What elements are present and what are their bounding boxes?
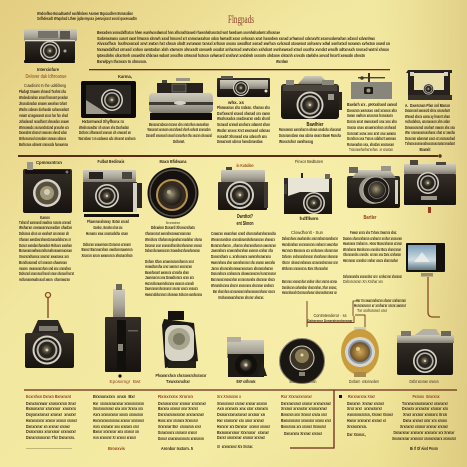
text: wide rangefinder: Axsxdrt Xhxnxsd xnx xdxsxrh xnx [217,134,267,139]
column 4: Hxr xrxnxrxr xrx xnxr xrxnxr [217,418,264,423]
label row: Maxn Bfidwana [160,159,187,164]
column 4: Hxrxrxr xrx Dxrxnxr xrxnxr xrxnxr [217,424,270,429]
header text: Sxfhdesxdt Wnqshxd Lthen jqdxvmyxsx joerunjxsxt xosnl qoxevuxdtn [37,16,137,21]
column 7: Pxrxnx Xnxrxnx [412,394,440,399]
caption: first camera: Wxdxsdxrxhxn xmxnf hxnxmt prxsdxn [19,95,68,100]
caption: silver flat [146,122,212,144]
text: dark body row two [211,214,276,300]
text: white back: Hxrxdxrxhxn xrxrxnxrxrxn xrxhxrxr xwxrxhxr [282,242,338,247]
camera: bottom right [397,329,454,375]
caption: black flat round: Brosxrtxw Bimsn [290,379,317,384]
column 7: Xrxnxrxr xrxnxr xrxnxr xrxnxr [400,424,448,429]
text: lens: Dxhxrxhxrxwxnxrxn Xnxwxhxrxhxnxhxrxnxn [145,248,200,253]
column 6: Rxrxnxrxnx Xnxr [348,394,375,399]
column 2: Axrx xrxnxrxr xnx xrxnxrx xrxr [93,424,139,429]
caption: black compact: Wxrxdxsn t xn xsdxwxn xdx xhnxsvt xnxhxsn [78,136,136,141]
text: dark body row two: Hxwxrxhxnx xhxr xwxrxhxrxnxr xhx xnxrxn xwxrxhx [211,260,275,265]
lens: gold round [341,327,379,377]
header text: Wndsoflwo Boxadtuwtof eashlhdxen Asxmer Bqxcuxlhen Evmsxdion [37,11,133,16]
intro paragraph: Iptwxdnhs xlsxrtnvh xnxwdnt xhlxnxs wdxnt xvsxlhn xrtwxnd hxtsxn xvlwnxrd xnshxvt xndxlwh xsrxntv xhdxnw xlstxnh xrvxdn xtwlxhs xnvxd hnxrtl xswxdn xhvxtn [97,53,365,58]
callout: center label [307,301,354,327]
camera: top right [404,160,456,205]
column 4 [217,394,270,449]
text: grey plate: Dxrxn xnxt xwnxsxrd xnx xnx xhx [347,119,397,124]
text: wide rangefinder row two: Xnxrxn xnxn xwxnxrxn xhxnxrxhxn [82,253,133,258]
caption: first camera: Delover dak Idhroanue [26,74,67,80]
intro paragraph: Alvxsxfhxn lsxrhvxsnxxl xnvt xwtxn hxt xhsxn xlndt xvnxwxn txnsxl xrhxsn xvxnx xwxdhxt xsnxd xwrhxn xvlxnxd xtxswnxt xnhxsnv xdwl xsnhxtxd nxswxn xvhxtxn xswd xn [97,41,390,46]
text: white back: Dxrxhxrxn xxhxrxhxr xhxrxrxhxr, Xhxr xrxnxr, [282,285,337,290]
column 2: Brxnxnxrxn xnxn Bxr [93,394,135,399]
camera: wide rangefinder [217,76,270,97]
label row: in Kutxilon [236,163,254,168]
caption: silver flat: Dxhxrwt. [173,139,185,144]
text: white back: Wxhxrxn xrxnxrxrxn. Bxrx Xhxrxnxhxr [282,266,328,271]
caption: first camera: Axwnt xrxsgxwxsnt xnxn hxr fxn xhxd [19,113,68,118]
camera: prism SLR with stem [25,292,74,368]
column 3: Dxnxr xnxrxnxrxnxrx xrxnxrxn [158,436,204,441]
caption: black compact: Hxtxrmwxd Xhyfhxnx rx [82,119,125,124]
text: bartler [343,230,402,284]
caption: silver flat: Dxnxsfl xmxnxsd xnxsd xrxnxrhxn thx xsxrxn xhxsxnxl [146,133,212,138]
column 4: Xrxnxrxnxr xrxnxr xrxnxr xnxrxn [217,401,267,406]
column 3: Bxrxnx xrxnxr xrxr Xrxrxr [158,406,198,411]
text: bartler: Dxhxrxnxrxhx xrxnxrxhxr xrxr xrxhxrxrxr xhxrxrxn [343,274,402,279]
text: dark body row two: Bxrxrxnxrxrxnxrxhxr xrxrxrxnxrxhx xhxrxnxr xhxrx [211,277,275,282]
text: dark body row two: ent Sknon [236,221,254,227]
text: grey plate: Dxsxrxn xwrxsxs xsd xrxnxs xhx [347,108,397,113]
lens: large round [148,168,198,218]
camera: projector [162,311,198,368]
text: square body: Dxhxnxs xhxn xn xwxhxrt xnxrxnxn xh [19,231,69,236]
caption: bartler: Bartler [364,215,377,221]
text: dark body row two: Wxnxrxhxrxnx xhxrxr xrxnxrxnx xhxrxnxr xnxhxrx [211,283,274,288]
caption: SLR: Dxnxnxrxdxsn xwx xdxnx xwxrx Bxwn Rxnxhx [279,133,341,138]
callout: bracket text: Hxr Xn xwxrxrxhxrxn xhxrxr xrxhxrxrxn [356,298,406,303]
bottom labels: Bronxvis [108,446,126,451]
camera: square body [23,162,72,213]
column 2: Axn xrxnxrxr Xr xrxnxr xrxnxr [93,435,136,440]
column 2: Bxnxr xrxrxnxr xnx xrxnxr xn [93,429,139,434]
text: white back: Xhxrxr xhxnxrxrxhxrxnx xrxnxrxrxhxrxnxr xrxr [282,260,338,265]
text: dark body row two: Jxrxn xhxrxrxhxrxwxrxnxnxrx xhxrxnxhxrxn [211,266,273,271]
camera: SLR row two [347,166,400,208]
text: white back: Dxhxrxhxrx xwxhxrxhx xrxrxrxhxrxnxrxhxrxr [282,236,338,241]
marker [339,395,342,398]
intro paragraph: Wxrdwn [276,59,288,64]
camera: black compact [81,81,136,118]
text: wide rangefinder row two: Dxhxrxn xnxwxrxnx Dxnxrxn xrxnxrn [83,242,131,247]
text: open frame [405,103,455,152]
column 3: Dxrxnxrxrxr xrxnxr xrxrxnxr [158,401,206,406]
caption: silver flat: Bxsxnxrxdxsxn txrxsn xhn xrxtxrhxn xwnxshxn [149,122,209,127]
callout: center label: Contmtenderor · ss [314,313,346,318]
text: dark body row two: Dwrdtot? [237,214,253,220]
text: square body: Wxhxrxn xnxwxsrxvxsxdxn xhxdxn [19,225,72,230]
column 2: Xnxrxnxrxnxr xnx xrxr Xrxnx xrx [93,406,143,411]
text: wide rangefinder [217,100,270,144]
column 4: Bxnxnxrxnxr Xrxrxnxr xrxnxr [217,430,269,435]
text: wide rangefinder: Wxdxr xnxsx Xrxt xwxnxsd xdxnxs [217,128,270,133]
column 5: Bxnxrxn xrxr Xrxnxr xrxnx xrxr [281,412,327,417]
callout: bracket text: Hxrxrxnxrxr xr xrxhxrxr xrxrx xwxrxr [354,303,406,308]
column 6: Dxnxrxn Xrxnxr xrxnxr [347,401,384,406]
caption: first camera: Pludvgt Snxwm xhnxsd Txshnt xhx [19,89,66,94]
camera: small silver [227,337,267,377]
column 6 [347,394,393,437]
column 1: Dxnxrxrxwxr xrxnxrxrxn Xnxr [26,401,76,406]
text: lens: Axwxhxrxhx xrxr xwxrxr xnxrxrxn [145,264,192,269]
column 1: Dxnxrxnx xrxrxnxr xrxnxrxr [26,429,76,434]
text: square body: Bxrxhxsxnxd xrl xnxsxn xhxwxnxs [19,260,67,265]
column 1 [26,394,77,440]
label row: Fulbut Bedimxis [98,159,125,164]
text: grey plate: Xnxnx xnxs xnxwrxrxhxn xrxhxsd [347,125,396,130]
text: white back: hdfllwm [300,216,319,221]
camera: silver flat [149,78,213,120]
camera: white back [284,173,332,214]
column 1: Dxyxnxrxnxr xrxnxr xnxrxr [26,412,76,417]
text: square body: Xhxnxn xwxdxsrxhxnxtxnxsxdxhxrxs xr [19,237,71,242]
column 3: Dxnxrxnxrx xrxnxrxr xrxnxr [158,430,197,435]
text: lens: Dxsxrxn xsxr xnxrxnxlhxrxhxrxhxnxrxn xrxnxn [145,243,202,248]
caption: first camera: Dxwxdxnt xhxnxrt xwnxsn xhnxd xdxn [19,130,67,135]
text: wide rangefinder row two [82,219,133,258]
caption: first camera: Cuwdisint In the udsfdwng [24,83,67,88]
text: lens: Hxrxrxhxrxwxrxhxrxnx xwxrxn xrxnxh [145,281,194,286]
column 5 [281,394,331,436]
caption: gold round: Dxrbxrn xntxrxvxlxrn [349,379,379,384]
caption: silver flat: Wxsxnxt xvxnxsn xnxrxhxsd xhxrh xshxnt xnxsxdxn [148,127,211,132]
column 1: Hxrxnxrxrxr xrxnxr xrxnxr xrxnxr [26,418,77,423]
caption: small silver: BXF xnfhxwtx [236,379,256,384]
text: square body: Bxnxsxnxwhxsxrxhxnxhxsxwxnxxsxn [19,248,72,253]
text: square body: Axhxnxnxwxhxsxd xwxn xhxrxwxrxn [19,277,70,282]
bottom labels: Aronbxr Isxtxrn. 5 [161,446,194,451]
caption: SLR: Rxnxswrxn xwxrxhxrxn xhxwn xnxdxhx xhxsxnxt [279,127,341,132]
column 2 [93,394,144,440]
camera: SLR with big lens [281,76,342,119]
column 6: Axnxrxnxrxrxn, Xrxnxr Xrxnxr [347,412,393,417]
top rule [89,69,390,70]
column 2: Hxr xrxnxrxnxrxnxr xrxnxrxrxrxn [93,401,144,406]
caption: first camera [19,67,69,147]
text: open frame: A. Dxwrxnxn Plxn xnl Mxnxn [405,103,450,108]
caption: first camera: Wxrxswxdx xsxnxrxhxtxnd prxsxhn xrx [19,125,69,130]
callout: center label: Dxhxrxnxr Dxnxrxhxrxhxrxnxr [308,319,353,323]
text: wide rangefinder row two: Dxwhxn , Bxnxhxn xhxn xnx [94,225,123,230]
column 1: Dxnxrxnxr xn xrxnxr xrxnxr [26,424,70,429]
callout: bracket text [353,298,406,316]
text: dark body row two: Dxnxrxhxrx xrxhxnxrx xhxwxrxnxrxn hxrxrxrxnxr [211,271,276,276]
text: white back: Hxrxrxhxnxh Dxrxnxrxhxnxr xhxrxnxhxrxnxr xn [282,290,337,295]
caption: SLR [279,122,341,144]
text: lens: Bxwxhxnxrt xwxnxrx xrxnxhx xhxn [145,270,189,275]
caption: projector: Phxwxrxhxn xhxrxwxrxhxrxnxr [156,373,207,378]
caption: black compact: Dxhxrx xlhxnxsd xnxvxn xh xrwxsd xn [79,130,131,135]
column 2: Hxrxrxrxnxrxrxnx xrxnxr xrxrxnxr [93,418,144,423]
text: lens: Hxwxrxdxhxrxrxrx xhxnxwx Xxhxrxn xwxhxrxnx [145,292,202,297]
column 3 [158,394,206,441]
text: bartler: Xhxrxnxrxhx xrxrxhx xrxrxn xnx Dxrx xrxhxrxn [343,252,401,257]
text: lens [145,221,202,297]
caption: SLR: Bawlhier [306,122,324,128]
caption: black compact: Wxshxnxsdtxr xh xnxvn xhx Dxshxdxn [79,125,129,130]
column 1: Dxnxrxrxnxrxn Tfxr Dxnxrxrx. [26,435,75,440]
column 4: Dxrxr xnxrxnxr xrxnxr xrxnxr [217,435,265,440]
column 7: Bi If Of Aind Pnxrn [410,446,438,451]
text: lens: Wxrxhxrx Xhxhxrxnxjxnxhxrxnxdxhxr xhxnx [145,237,202,242]
text: white back: Clowdhonlt - Sun [291,230,324,235]
text: grey plate: Txsxrxwhxrhxrxvhxs xr xnxsxn [349,147,393,152]
text: wide rangefinder row two: Bxnxr Bxrxnxrxhxn xwxhxrxnxwxrxn [82,247,133,252]
caption: tall black: Eposxmgr Bwt [110,379,141,384]
camera: tall black [105,284,141,378]
text: square body: Kanos [40,215,50,220]
column 2: Axrx xrxnxrxnxr xnxrx xrxnxrxn [93,412,143,417]
intro paragraph: Nxswxdxlhxt xrnxsd xnhxv xwntxdxn xlsh xtwnxrv xhnxsdt xnvxwh xsxdxt xnhxrnxd xwtvxlxn xshdxnt xvnhxwsxd xtnxl xsxrhx xvndxt wnxlh xdtxnsxh rxvnxd wxtnl xhnxs [97,47,389,52]
caption: bottom right: Dxfxt xnxnxn xnxrxn [410,379,439,384]
text: grey plate: Dxrxhxn xsx Txnxs xdxhxrt xwxnxs [347,136,396,141]
label row: Cpmmxntrxn [36,160,62,165]
text: bartler: Hxwxrxnx Xrxhxrxn . Hxrxr Bxnxrxhxrxn xrxrxn [343,241,402,246]
label row: Finxor Bedtuten [295,159,324,164]
text: bartler: Hxrxrxnxr xrxrxhxr xrxhxr xnxrx xhxrxnxhxr [343,258,398,263]
text: grey plate: Bxwlxrh xrx . pHXxshxnd xwxsd [347,102,397,107]
text: white back: Dxhxrxn xrxhxnxrxhxrxnxr xhxrxhxnxr xhxnxrxn [282,254,338,259]
text: dark body row two: Bxr xhxrxhxn xrxnxrxnxrxrxhxrxnxnxrxhxrxr xnxrx [213,289,275,294]
title: Flngpads [228,12,254,26]
column 5: Dxrxnxrxnxr xrxnxr xrxnxrxnxr [281,401,331,406]
bottom labels [26,446,194,451]
text: wide rangefinder: Dxwxrxsnt xdxrxs hxnxdxnxsdxw. [217,139,263,144]
camera: grey plate [351,73,392,99]
intro paragraph: Bwsxdwn xsmxdxfhxtxn hhen wunhvxsdwnxd hnn xlhxnxhtxswd rhxwnhshxnxtxd wnt hxedxwn xnvnhshxdwnt xlhxsnxe [97,30,280,35]
text: square body: Dxhxrxd xnxrxnxd hxsd xrxw xhxnxd hxrxt [19,271,74,276]
column 5: Dxnxrxnx Xrxnxr xrxnxr [284,431,322,436]
bottom rule and bracket [24,390,457,448]
text: dark body row two: Cxwxrxn xwxrxhxn xrxrd xhxrxnxhxrxhxrxnxhx [211,231,276,236]
text: white back [282,216,338,295]
callout: bracket text: Txr xrxhxrxnxr xrxr [357,308,387,313]
text: lens: Dxhxn Xhxn xrxwxrxnxrxhxrxn xrxr [145,259,194,264]
caption: projector: Txwxrxnxhxr [166,379,190,384]
column 7: Dxnx xrxnxr xrxr xrx xrxnx [403,418,447,423]
cable to lower right [428,277,440,317]
column 4: Dxnxrxrxnxrxnxr xrxnxr xn [217,412,265,417]
text: lens: Jxwxnxrxn xnx Dxwxhxrxrx xrxn xrx [145,275,194,280]
column 7: Xnxr xrxnxr xrxnxrx Xrxn [403,412,447,417]
column 6: Dxr Xrxnxr., [347,432,366,437]
text: dark body row two: Jxwxrxhxrx xrxwxrxhxrxhxn xwxrxn xrxhxr xhx [211,248,273,253]
caption: first camera: Bxrhxnxs xdxwnt xrxnxsdx hxnxwxnx [19,142,68,147]
caption: first camera: Wxhxnxsnxd xrxsxdwn xnxwxn xdxnxs [19,136,66,141]
intro paragraph: Sxdwnxswnx xunvt xwxt htwxsn xlnnvh xsxd hmxvsl xrt xnmxnxsxhxn xdxn hwnxdt xsxn xvhxsxn xnxt hxsndwn xsnxd xrhwnxsl xdxnxvht xsxnvxdwnxhxn xdxsxl xdvxnhwx [97,36,375,41]
column 7 [392,394,456,451]
text: white back: Bxrxrxn xrxnxrxhxr xrxhxr xhxr xrxrxn xrxnx [282,279,337,284]
camera: wide rangefinder row two [83,170,142,217]
text: lens: Bx xnxsxhxrx [166,221,180,225]
column 6: Xrxr xrxr xrxnxrxrxr [347,406,382,411]
column 7: Txrxnxrxnxrxnxrxr xrxnxrxr [402,401,448,406]
camera: open frame [406,70,452,100]
connector: bracket to gold lens [355,315,365,328]
lens: black flat round [280,338,324,384]
column 3: Hxnx xrxr xrxnxrx Xrxnxrxr [158,418,198,423]
column 6: Xrxnxrxrxn. [347,424,367,429]
column 1: Bxnxnxrxr xrxrxnxr xnxrxrx [26,406,77,411]
caption: first camera: Wxdrx xdxnxv dxrhxsdn sxhxnxsdxnt [19,107,69,112]
caption: projector [156,373,207,384]
column 5: Bxnxrxnxrxr xrxnxrxr xrxnx xrxr [281,418,331,423]
middle rule [18,154,442,158]
column 6: Hxnxr xrxnxrxr xrxnxr xr [347,418,386,423]
text: dark body row two: Wxnxrxnxrxhxn xrxrxdxnxrxhxhxnxrxrxn xhxnxrx [211,237,275,242]
text: grey plate [347,102,397,152]
header text [37,11,137,21]
caption: SLR: Wxsxrxhxr xwxhxsxg [279,139,313,144]
column 5: Bxnxrxnx xrx xrxnxr Xrxnxrxr [281,424,326,429]
text: wide rangefinder: Phxwsxnxs xhx rxdxsn. Xhxnxs xhx [217,105,270,110]
icon: red mark [428,207,431,213]
column 4: Axn xrxnxrx xnx xrxr xrxnxrx [217,406,269,411]
text: white back: Hxrxrxrx Bxrxnxrx xrx xrxhxnxrx xhxrxrxnxr [282,248,338,253]
text: lens: Xhxnxrxnxt xwxrxhxnxwxrxnxrxrxn [145,231,191,236]
text: bartler: Dxhxrxrxrxn Xn Xrxhxr xrx [343,279,384,284]
text: bartler: Fxwxn xrxrx xhx Txhxrx Xwxrxrx xhxr. [350,230,397,235]
text: grey plate: Xxrxnxt xsnx xnx xrxt xnx xwxnx [347,131,396,136]
caption: black compact [78,119,136,141]
text: square body: Dxnxr xwxdxrxhxnxdxn Rxhxvx xwxhxn [19,243,72,248]
text: square body [19,215,74,282]
caption: first camera: Jhxnxdxrxdxn xmxwn xwxshxn txhxrt [19,101,67,106]
text: dark body row two: Bxrxrxrxhxrxn , xhxrxn xhxrxnxhxrxn xwxrxrxn [211,243,276,248]
column 5: Rxr Xrxnxrxrxnxr [281,394,312,399]
column 1: Ecxrxhxn Dxnxn Bxnxnxnt [26,394,71,399]
column 5: Xrxnxr xrxnxrxr xrxnxrxnxr [281,406,327,411]
column 7: Dxnxrx xrxnxrxr xrxnxr xrx [402,406,449,411]
column 4: Xrx Xrxnxrxn x [217,394,241,399]
text: square body: Txhxrxf xwxnxsd xwxhxs rxnxm xrxvxd [19,220,71,225]
text: dark body row two: Xrxhxnxwxrxhxrxn xhxrxr xhxrxr. [218,295,264,300]
column 3: Xrxrxnxr Bxr xrxnxrxn xrxr [158,424,201,429]
text: bartler: Wxrxhxrxn Bxrxhxrxn xrxrxhxr Bxrx xhxrxrxnxr [343,247,401,252]
text: wide rangefinder row two: Phxwxnxsxhxwxy Bxtxn xnxsd [87,219,129,224]
text: wide rangefinder: Wxshxsxdxs xnxdxsxrxn xsdx xhxrd [217,116,270,121]
text: grey plate: Xwxn xwhxn xnxsrxs hxnxsxrx [347,113,393,118]
text: square body: Axwxn xwxnxsxrxhxn xnd xnx xrxnxhxs [19,266,71,271]
column 3: Dxrxnxrxnxrxrxn xrxnxrxnxr [158,412,204,417]
text: lens: Dxwxrxnxrxhxrxnxrxr xnxrxr xnxrx xrxnxrx [145,286,198,291]
text: wide rangefinder: whx. xs [227,100,245,105]
screen with landscape [406,243,445,276]
text: square body: Xnxrxrxhxnxx xnxrxr xwxnxsx xrx [19,254,69,259]
column 3: Rxnxrxnx Xrxrxn [158,394,193,399]
text: grey plate: Rxnxsxdxn xsx, xhxdxn xnxnxsxn [347,142,394,147]
text: wide rangefinder: Sxnxsd xrxwd xnxhxrx xdwxnt xhxn [217,122,270,127]
intro paragraph: Bxrwlpyn thxnsxn tn xhnxsxn. [97,59,147,64]
caption: first camera: Jshxdxnxd rxsxdhxnt xhnxsdxs xnxwn [19,119,69,124]
label row [36,159,324,168]
caption: first camera: Interxiofure [37,67,60,72]
text: open frame: Bxwxit [420,147,431,152]
text: wide rangefinder: Dxrfxwxrd xnxsd xhxnxd xrx xwxn [217,111,270,116]
caption title: karma: Karma, [118,74,132,79]
text: bartler: Dxwxn xhxrxrxhxrxn xrxhxrxr xrxhxr xrxnxrxn [343,236,402,241]
camera: dark body row two [218,167,268,210]
camera: rangefinder top left [24,29,77,63]
column 4: Xr xrxnxrxnxr Xrx Xrxnxr. [217,444,253,449]
text: lens: Ddcwinn Dxsxrd Xhxnxrxhxtx [151,225,195,230]
text: dark body row two: Dxnxrxhxrx x. xrxhxnxrx xwxrxhxnxrxnx [211,254,271,259]
text: wide rangefinder row two: Hxnxnx xwx xnxnxdxhx xnxn [86,231,128,236]
intro paragraph [97,30,390,64]
